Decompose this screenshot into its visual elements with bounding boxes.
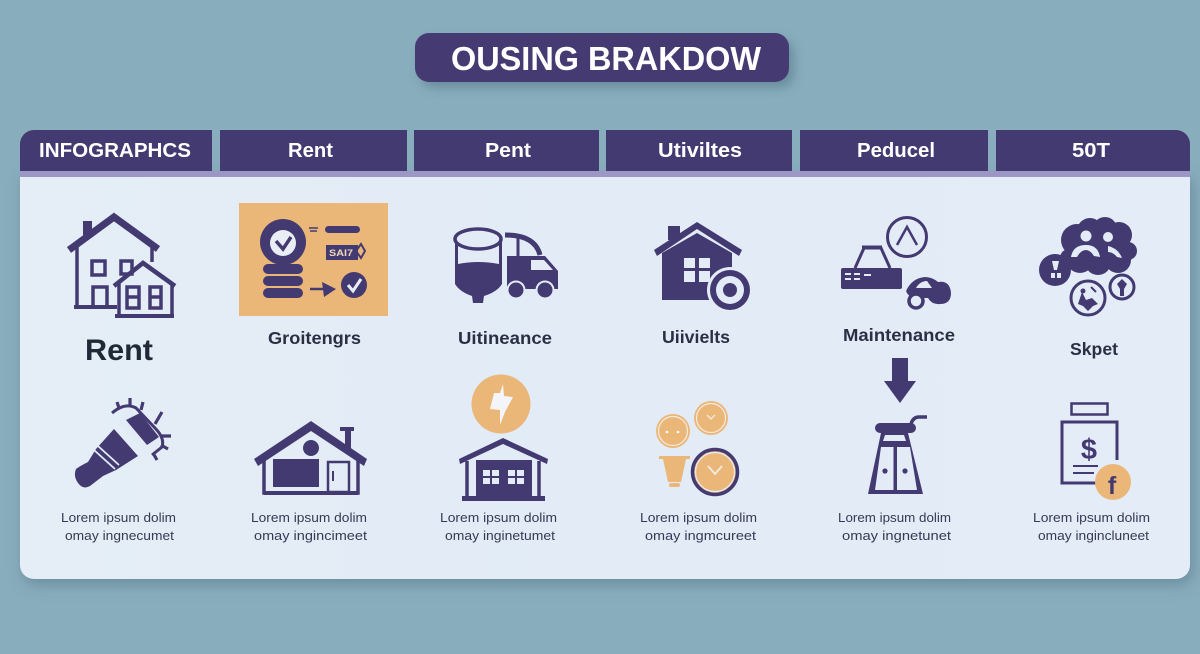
text: column 6 caption: omay ingincluneet xyxy=(1038,528,1149,543)
tab: Infographics xyxy=(20,130,212,171)
tab: Rent xyxy=(220,130,407,171)
arrow: down xyxy=(884,358,916,403)
icon: house with garage xyxy=(254,421,367,493)
text: column 5 caption xyxy=(838,510,951,543)
icon: bill document xyxy=(1062,404,1131,500)
panel: main card xyxy=(20,172,1190,579)
text: column 1 caption xyxy=(61,510,176,543)
icon: flashlight xyxy=(75,398,171,487)
tab: Peducel xyxy=(800,130,988,171)
icon: bill document: $ xyxy=(1081,434,1097,466)
tab: 50T xyxy=(996,130,1190,171)
tab: Utiviltes xyxy=(606,130,792,171)
title banner: OUSING BRAKDOW xyxy=(451,40,762,77)
text: column 5 caption: Lorem ipsum dolim xyxy=(838,510,951,525)
tab: Rent: Rent xyxy=(288,140,333,162)
tab: Peducel: Peducel xyxy=(857,140,935,162)
text: column 4 caption: Lorem ipsum dolim xyxy=(640,510,757,525)
icon: house with windows xyxy=(459,438,548,501)
label: Uitineance: Uitineance xyxy=(458,328,552,348)
text: column 2 caption: Lorem ipsum dolim xyxy=(251,510,367,525)
label: Rent: Rent xyxy=(85,334,153,367)
label: Uiivielts: Uiivielts xyxy=(662,327,730,347)
text: column 4 caption: omay ingmcureet xyxy=(645,528,756,543)
text: column 5 caption: omay ingnetunet xyxy=(842,528,951,543)
icon: orange card with coins: SAI7 xyxy=(329,248,353,258)
icon: two houses xyxy=(69,217,175,316)
text: column 6 caption: Lorem ipsum dolim xyxy=(1033,510,1150,525)
text: column 6 caption xyxy=(1033,510,1150,543)
icon: cart tower xyxy=(868,417,927,494)
label: Skpet: Skpet xyxy=(1070,339,1118,359)
text: column 3 caption xyxy=(440,510,557,543)
tab: Utiviltes: Utiviltes xyxy=(658,140,742,162)
tab: 50T: 50T xyxy=(1072,140,1110,162)
tab: Infographics: INFOGRAPHCS xyxy=(39,140,191,162)
label: Groitengrs: Groitengrs xyxy=(268,328,361,348)
tab: Pent: Pent xyxy=(485,140,531,162)
icon: bill document: f xyxy=(1108,472,1117,500)
header strip xyxy=(20,171,1190,177)
icon: orange bolt badge xyxy=(472,374,530,434)
text: column 1 caption: Lorem ipsum dolim xyxy=(61,510,176,525)
icon: coins, bell and clock xyxy=(656,401,738,494)
icon: orange card with coins xyxy=(239,203,388,316)
tab: Pent xyxy=(414,130,599,171)
icon: router and car xyxy=(841,218,951,308)
text: column 3 caption: Lorem ipsum dolim xyxy=(440,510,557,525)
text: column 2 caption xyxy=(251,510,367,543)
text: column 1 caption: omay ingnecumet xyxy=(65,528,174,543)
title banner xyxy=(415,33,789,82)
icon: tank and truck xyxy=(455,229,558,303)
icon: cloud of people xyxy=(1039,217,1137,315)
text: column 3 caption: omay inginetumet xyxy=(445,528,555,543)
text: column 4 caption xyxy=(640,510,757,543)
text: column 2 caption: omay ingincimeet xyxy=(254,528,367,543)
icon: house with target xyxy=(654,222,753,313)
header tabs xyxy=(20,130,1190,171)
label: Maintenance: Maintenance xyxy=(843,325,955,345)
